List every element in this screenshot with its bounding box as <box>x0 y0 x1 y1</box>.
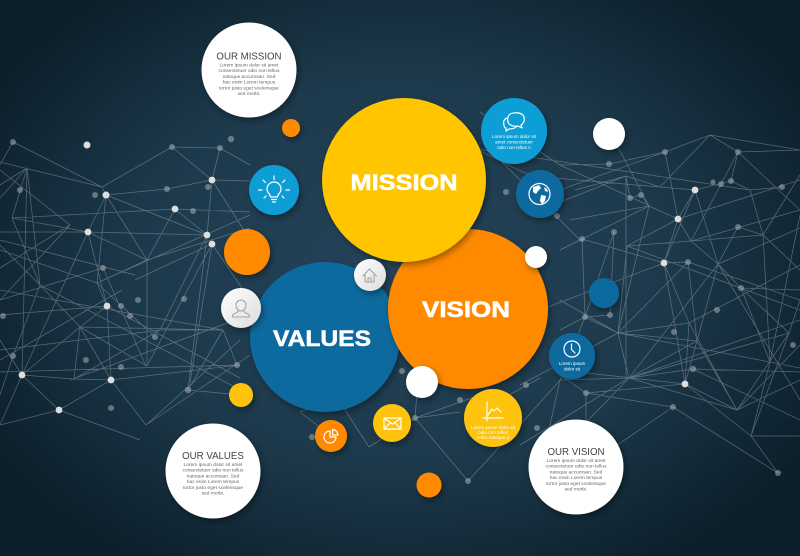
icon bubble: chart <box>464 389 522 447</box>
card: our values: consectetuer odio non tellus <box>183 468 244 474</box>
circle: mission: MISSION <box>350 170 458 195</box>
card: our values <box>166 424 260 518</box>
dot: white top right <box>593 118 625 150</box>
card: our values: hac enim Lorem tempus <box>187 479 240 485</box>
icon bubble: clock <box>549 333 595 379</box>
dot: orange top <box>282 119 300 137</box>
icon bubble: chart: tellus natoque it <box>477 435 510 440</box>
circle: mission <box>322 98 486 262</box>
card: our vision: Lorem ipsum dolor sit amet <box>547 458 606 464</box>
icon bubble: chart: odio non tellus <box>478 430 509 435</box>
dot: white near vision <box>525 246 547 268</box>
card: our mission <box>202 22 296 118</box>
card: our mission: tortor justo eget scelerisque <box>219 85 279 91</box>
card: our vision: hac enim Lorem tempus <box>550 475 603 481</box>
card: our vision: sed morbi. <box>565 486 587 492</box>
card: our mission: Lorem ipsum dolor sit amet <box>220 62 279 68</box>
icon bubble: pie chart <box>315 420 347 452</box>
card: our vision: tortor justo eget scelerisque <box>546 481 606 487</box>
icon bubble: clock: Lorem ipsum <box>559 361 585 366</box>
card: our vision: natoque accumsan. Sed <box>550 469 603 475</box>
circle: values <box>250 262 400 412</box>
dot: white bottom centre <box>406 366 438 398</box>
icon bubble: chart: Lorem ipsum dolor sit <box>471 425 516 430</box>
circle: values: VALUES <box>273 326 371 351</box>
icon bubble: speech <box>481 98 547 164</box>
card: our vision: OUR VISION <box>547 447 605 458</box>
card: our values: tortor justo eget scelerisque <box>183 485 243 491</box>
icon bubble: person <box>221 288 261 328</box>
card: our vision: consectetuer odio non tellus <box>546 464 607 470</box>
icon bubble: light bulb <box>249 165 299 215</box>
card: our values: OUR VALUES <box>182 451 244 462</box>
card: our mission: OUR MISSION <box>216 52 282 62</box>
card: our values: natoque accumsan. Sed <box>187 473 240 479</box>
network mesh background <box>0 112 800 484</box>
icon bubble: mail <box>373 404 411 442</box>
dot: blue right <box>589 278 619 308</box>
dot: orange left <box>224 229 270 275</box>
card: our vision <box>528 420 624 514</box>
icon bubble: speech: odio non tellus n <box>497 145 531 150</box>
card: our values: sed morbi. <box>202 490 224 496</box>
icon bubble: globe <box>516 170 564 218</box>
card: our mission: consectetuer odio non tellus <box>219 68 280 74</box>
card: our mission: natoque accumsan. Sed <box>223 74 276 80</box>
icon bubble: speech: Lorem ipsum dolor sit <box>492 134 537 139</box>
card: our values: Lorem ipsum dolor sit amet <box>184 462 243 468</box>
icon bubble: clock: dolor sit <box>564 366 581 372</box>
icon bubble: house <box>354 259 386 291</box>
card: our mission: sed morbi. <box>238 91 260 97</box>
dot: yellow left <box>229 383 253 407</box>
circle: vision: VISION <box>422 297 510 322</box>
circle: vision <box>388 229 548 389</box>
icon bubble: speech: amet consectetuer <box>495 140 533 144</box>
card: our mission: hac enim Lorem tempus <box>223 80 276 86</box>
dot: orange bottom <box>416 472 442 498</box>
